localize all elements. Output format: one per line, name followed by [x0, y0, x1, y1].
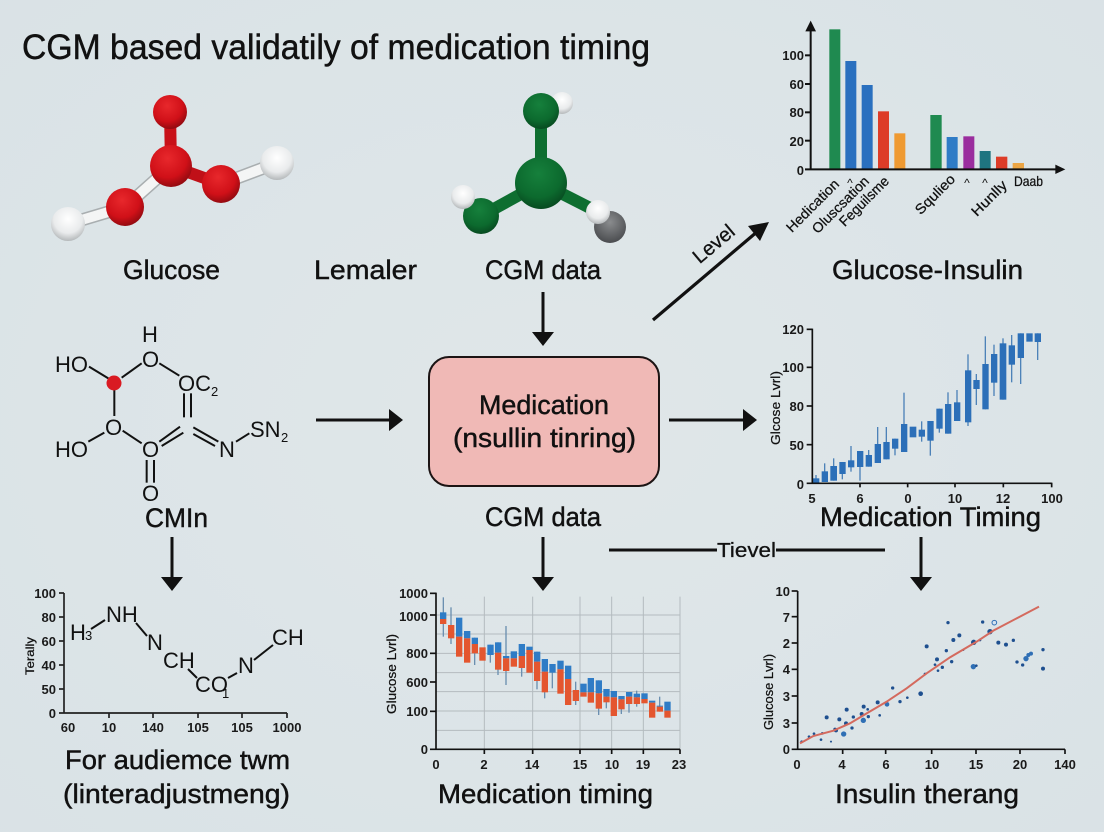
- falling chart labels: 2: [480, 757, 488, 772]
- scatter chart: [792, 591, 1065, 754]
- bar chart labels: [782, 48, 1043, 236]
- axis numbers: 0: [49, 706, 56, 721]
- label: Glucose: Glucose: [123, 255, 220, 285]
- bar chart labels: Hedication: [783, 176, 842, 235]
- candlestick labels: [768, 322, 1063, 506]
- bar chart labels: 20: [790, 134, 804, 149]
- bar chart labels: ^: [982, 176, 988, 190]
- scatter labels: 10: [776, 584, 790, 599]
- axis numbers: 40: [42, 658, 56, 673]
- box: medication: Medication: [479, 390, 609, 420]
- label: For audience text: (linteradjustmeng): [63, 779, 290, 809]
- candlestick labels: 10: [948, 491, 962, 506]
- axes: [807, 329, 1052, 487]
- axes: [792, 591, 1065, 754]
- bonds: [91, 620, 273, 678]
- label: Insulin therang: Insulin therang: [835, 779, 1019, 809]
- falling chart labels: 800: [406, 646, 428, 661]
- axis numbers: 10: [102, 720, 116, 735]
- axes: [59, 593, 287, 718]
- candlestick labels: 120: [782, 322, 804, 337]
- atom labels: OC: [178, 371, 211, 396]
- label: CMIn: CMIn: [145, 503, 208, 533]
- scatter labels: 6: [882, 757, 890, 772]
- atom labels: N: [238, 653, 254, 678]
- falling chart labels: 0: [432, 757, 440, 772]
- axis numbers: 100: [34, 586, 56, 601]
- arrow: CGM data down: [532, 537, 554, 591]
- label: CGM data top: CGM data: [485, 255, 602, 285]
- candlestick labels: 80: [790, 399, 804, 414]
- candlestick labels: 5: [808, 491, 816, 506]
- candlestick labels: 100: [1041, 491, 1063, 506]
- label: Level: Level: [689, 221, 740, 268]
- falling chart labels: 14: [525, 757, 540, 772]
- bar chart labels: 100: [782, 48, 804, 63]
- scatter labels: 2: [783, 636, 790, 651]
- scatter labels: 0: [793, 757, 801, 772]
- atom labels: H: [70, 620, 86, 645]
- wicks: [443, 597, 660, 715]
- falling chart labels: Glucose Lvrl): [384, 634, 399, 714]
- axis numbers: 140: [142, 720, 164, 735]
- scatter labels: 20: [1013, 757, 1027, 772]
- scatter labels: 4: [838, 757, 846, 772]
- scatter labels: 10: [925, 757, 939, 772]
- atom labels: 3: [85, 628, 92, 643]
- icon: red glucose molecule: [51, 95, 294, 241]
- falling chart labels: [384, 586, 686, 772]
- blue candle tops: [440, 612, 671, 711]
- bar chart labels: Squlieo: [911, 171, 958, 217]
- axis numbers: [23, 586, 301, 735]
- atom labels: SN: [250, 417, 281, 442]
- axis numbers: Terally: [23, 637, 37, 675]
- candlestick labels: 0: [904, 491, 912, 506]
- atom: red: [106, 376, 122, 390]
- falling chart labels: 23: [672, 757, 686, 772]
- candlestick labels: 6: [856, 491, 864, 506]
- atom labels: CO: [195, 672, 228, 697]
- grid: [436, 597, 680, 749]
- scatter labels: 7: [783, 610, 790, 625]
- arrow: level diagonal: [653, 222, 769, 320]
- points: [800, 620, 1045, 743]
- atom labels: 1: [222, 686, 229, 701]
- arrow: molecule to medication: [316, 409, 403, 431]
- bar chart labels: 80: [790, 105, 804, 120]
- falling chart labels: 15: [573, 757, 587, 772]
- candlestick labels: 0: [797, 477, 804, 492]
- scatter labels: [761, 584, 1076, 772]
- candles: [813, 333, 1041, 483]
- axes: [805, 21, 1065, 174]
- atom labels: H: [142, 322, 158, 347]
- candlestick labels: Glcose Lvrl): [768, 371, 783, 445]
- bonds: [88, 363, 249, 483]
- bar chart labels: Hunlly: [968, 177, 1010, 219]
- label: Medication timing: Medication timing: [438, 779, 653, 809]
- bar chart labels: ^: [964, 176, 970, 190]
- box: medication: [429, 357, 659, 486]
- bar chart labels: Daab: [1014, 173, 1043, 189]
- scatter labels: 0: [783, 742, 790, 757]
- atom labels: HO: [55, 437, 88, 462]
- arrow: CGM data to medication: [532, 292, 554, 346]
- axis numbers: 105: [187, 720, 209, 735]
- bar chart labels: 0: [797, 163, 804, 178]
- falling chart labels: 0: [421, 742, 428, 757]
- atom labels: CH: [163, 648, 195, 673]
- candlestick labels: 100: [782, 360, 804, 375]
- bar chart labels: Feguilsme: [836, 173, 892, 229]
- bar chart labels: Oluscsation: [808, 173, 872, 236]
- orange candle bodies: [440, 619, 671, 718]
- arrow: Medication Timing down: [910, 537, 932, 591]
- atom labels: O: [142, 347, 159, 372]
- arrow: medication to timing chart: [669, 409, 757, 431]
- chart: structural formula on axes: [23, 586, 304, 735]
- atom labels: [55, 322, 288, 506]
- atom labels: O: [142, 437, 159, 462]
- atom labels: N: [219, 437, 235, 462]
- scatter labels: 3: [783, 689, 790, 704]
- candlestick chart: glucose falling: [430, 593, 680, 754]
- candlestick labels: 50: [790, 438, 804, 453]
- axis numbers: 80: [42, 610, 56, 625]
- atom labels: HO: [55, 352, 88, 377]
- falling chart labels: 600: [406, 675, 428, 690]
- label: For audience text: [63, 745, 290, 809]
- scatter labels: Glucose Lvrl): [761, 654, 776, 730]
- bars: [829, 29, 1024, 169]
- bar chart: top right: [805, 21, 1065, 174]
- falling chart labels: 100: [406, 704, 428, 719]
- falling chart labels: 10: [605, 757, 619, 772]
- scatter labels: 4: [783, 662, 791, 677]
- atom labels: NH: [106, 602, 138, 627]
- falling chart labels: 19: [636, 757, 650, 772]
- candlestick labels: 12: [996, 491, 1010, 506]
- axis numbers: 1000: [273, 720, 301, 735]
- wicks: [816, 333, 1038, 483]
- falling chart labels: 1000: [399, 609, 428, 624]
- candlestick chart: glucose rising: [807, 329, 1052, 487]
- trend line: [800, 607, 1039, 743]
- bar chart labels: ^: [847, 176, 853, 190]
- atom labels: CH: [272, 625, 304, 650]
- axis numbers: 50: [42, 682, 56, 697]
- molecule diagram: structural formula: [55, 322, 288, 506]
- label: Glucose-Insulin: Glucose-Insulin: [832, 255, 1023, 285]
- label: Lemaler: Lemaler: [314, 255, 417, 285]
- label: CGM data lower: CGM data: [485, 502, 602, 532]
- atom labels: [70, 602, 304, 701]
- arrow: CMIn down: [161, 537, 183, 591]
- scatter labels: 140: [1054, 757, 1076, 772]
- axis numbers: 60: [42, 634, 56, 649]
- icon: green molecule: [451, 92, 626, 243]
- label: Medication Timing: Medication Timing: [820, 502, 1041, 532]
- box: medication: (nsullin tinring): [453, 423, 636, 453]
- title: CGM based validatily of medication timing: [22, 28, 650, 67]
- label: For audience text: For audiemce twm: [65, 745, 290, 775]
- falling chart labels: 1000: [399, 586, 428, 601]
- axes: [430, 593, 680, 754]
- atom labels: O: [142, 481, 159, 506]
- atom labels: O: [105, 415, 122, 440]
- atom labels: 2: [281, 430, 288, 445]
- axis numbers: 60: [61, 720, 75, 735]
- scatter labels: 15: [969, 757, 983, 772]
- scatter labels: 3: [783, 716, 790, 731]
- axis numbers: 105: [231, 720, 253, 735]
- atom labels: 2: [211, 384, 218, 399]
- bar chart labels: 60: [790, 77, 804, 92]
- atom labels: N: [147, 630, 163, 655]
- connector: Tievel: Tievel: [717, 540, 776, 562]
